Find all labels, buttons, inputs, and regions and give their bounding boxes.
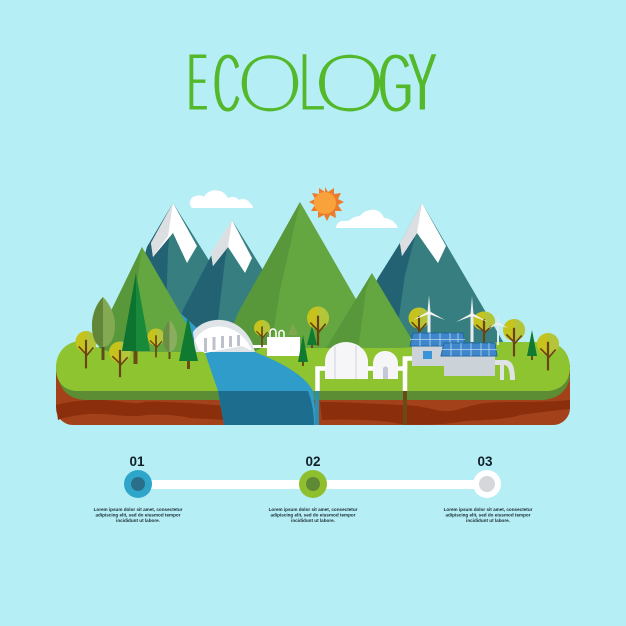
title: E: [188, 36, 208, 130]
mountain green small: [325, 273, 418, 350]
mountains back teal left: [120, 203, 262, 345]
domes: [325, 342, 398, 379]
dam: [193, 320, 255, 353]
mountain teal right: [345, 203, 505, 345]
step 2: incididunt ut labore.: [291, 518, 335, 523]
title: L: [298, 35, 326, 129]
step 3: incididunt ut labore.: [466, 518, 510, 523]
step 1: 01: [129, 454, 145, 469]
step 2: [269, 454, 358, 523]
title: O: [236, 37, 304, 131]
step 3: [444, 454, 533, 523]
step 1: incididunt ut labore.: [116, 518, 160, 523]
pine trees: [122, 273, 537, 369]
title: Y: [407, 37, 438, 130]
cloud left: [190, 190, 253, 208]
title: G: [378, 37, 413, 131]
platform grass top: [56, 341, 570, 391]
step 3: 03: [477, 454, 493, 469]
stream behind dam: [177, 310, 197, 345]
title: C: [213, 36, 241, 130]
timeline bar: [138, 480, 487, 489]
underground pipes: [315, 391, 407, 425]
cloud right: [336, 210, 398, 228]
title: O: [313, 36, 386, 130]
step 2: adipiscing elit, sed do eiusmod tempor: [270, 512, 356, 518]
water: river: [205, 346, 317, 425]
mountains back teal middle: [170, 220, 300, 345]
step 1: Lorem ipsum dolor sit amet, consectetur: [94, 507, 183, 512]
step 2: Lorem ipsum dolor sit amet, consectetur: [269, 507, 358, 512]
step 1: [94, 454, 183, 523]
mountain green centre: [222, 202, 368, 352]
title: [188, 35, 438, 131]
wind turbines: [413, 295, 508, 345]
step 3: adipiscing elit, sed do eiusmod tempor: [446, 512, 531, 518]
mountain green left: [97, 247, 195, 352]
sun: [309, 187, 344, 221]
oval trees: [92, 297, 298, 360]
step 3: Lorem ipsum dolor sit amet, consectetur: [444, 507, 533, 512]
buildings with solar panels: [410, 333, 515, 380]
step 2: 02: [305, 454, 321, 469]
factory: [253, 329, 300, 356]
platform soil layers: [56, 365, 570, 425]
round trees: [76, 306, 559, 377]
pipes: [318, 358, 418, 391]
step 1: adipiscing elit, sed do eiusmod tempor: [96, 512, 181, 518]
